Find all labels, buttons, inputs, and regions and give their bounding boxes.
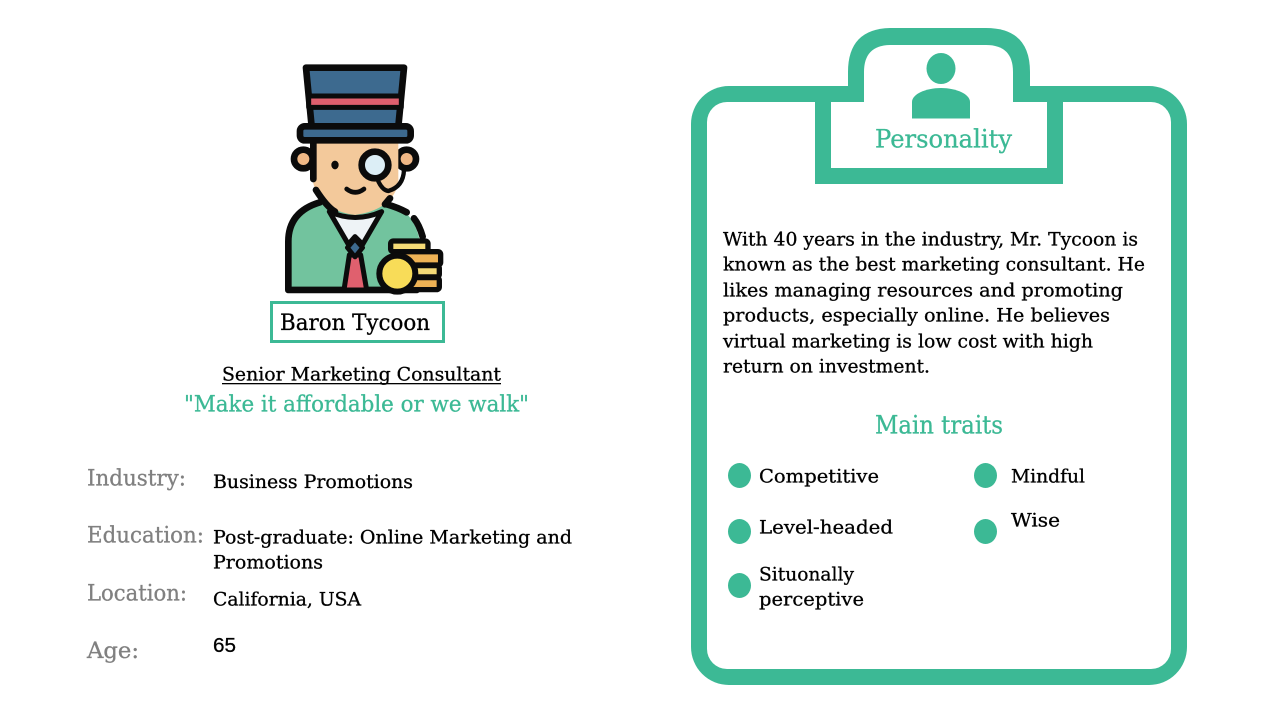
trait: level-headed bbox=[728, 518, 893, 544]
trait: situonally perceptive: Situonally bbox=[759, 564, 855, 586]
trait: mindful bbox=[974, 463, 1085, 488]
icon: ears bbox=[294, 150, 416, 168]
details: industry: Business Promotions bbox=[213, 472, 413, 493]
personality description: virtual marketing is low cost with high bbox=[722, 332, 1093, 352]
job title: Senior Marketing Consultant bbox=[222, 364, 502, 386]
details: industry bbox=[87, 466, 413, 493]
icon: hat brim bbox=[300, 126, 411, 140]
icon: hat ribbon bbox=[309, 96, 401, 107]
trait: wise bbox=[974, 510, 1060, 544]
personality description: With 40 years in the industry, Mr. Tycoon is bbox=[723, 230, 1138, 250]
character illustration: Baron Tycoon bbox=[288, 68, 441, 292]
icon: monocle chain bbox=[377, 170, 404, 191]
quote: "Make it affordable or we walk" bbox=[184, 392, 529, 418]
icon: hat crown bbox=[306, 68, 404, 127]
heading: personality: Personality bbox=[875, 124, 1013, 154]
details: age: Age: bbox=[86, 638, 139, 664]
icon: face bbox=[313, 138, 398, 215]
name box: Baron Tycoon bbox=[280, 310, 430, 336]
personality description: known as the best marketing consultant. He bbox=[723, 254, 1145, 276]
personality description bbox=[722, 230, 1145, 378]
icon: monocle bbox=[362, 152, 388, 178]
details: education: Post-graduate: Online Marketing and bbox=[213, 528, 572, 548]
trait: wise: Wise bbox=[1011, 510, 1060, 532]
trait: mindful: Mindful bbox=[1011, 466, 1085, 488]
details: location bbox=[87, 580, 362, 610]
heading: main traits: Main traits bbox=[875, 410, 1003, 440]
details: age bbox=[86, 635, 236, 664]
personality description: likes managing resources and promoting bbox=[723, 280, 1123, 302]
icon: shirt collar bbox=[329, 212, 382, 244]
panel: personality clipboard bbox=[691, 28, 1187, 685]
details: location: California, USA bbox=[213, 590, 362, 610]
icon: suit fill bbox=[288, 202, 420, 290]
details: location: Location: bbox=[87, 580, 187, 606]
icon: suit outline bbox=[288, 202, 423, 290]
details: education bbox=[87, 522, 572, 574]
icon: person bbox=[912, 53, 970, 118]
details: industry: Industry: bbox=[87, 466, 186, 492]
trait: competitive bbox=[728, 463, 879, 488]
icon: smile bbox=[347, 189, 364, 192]
icon: face outline bbox=[313, 141, 390, 212]
name box bbox=[272, 302, 444, 342]
icon: eye bbox=[331, 161, 339, 169]
personality description: products, especially online. He believes bbox=[723, 306, 1110, 326]
trait: situonally perceptive: perceptive bbox=[759, 590, 864, 610]
details: education: Promotions bbox=[213, 552, 323, 574]
details: age: 65 bbox=[213, 635, 236, 657]
clipboard frame bbox=[691, 28, 1187, 685]
icon: tie knot bbox=[347, 239, 363, 257]
personality description: return on investment. bbox=[723, 356, 930, 378]
icon: necktie bbox=[344, 255, 367, 290]
trait: competitive: Competitive bbox=[759, 466, 879, 488]
trait: situonally perceptive bbox=[728, 564, 864, 610]
details: education: Education: bbox=[87, 522, 204, 548]
icon: coin stack bbox=[379, 241, 441, 292]
trait: level-headed: Level-headed bbox=[759, 518, 893, 538]
